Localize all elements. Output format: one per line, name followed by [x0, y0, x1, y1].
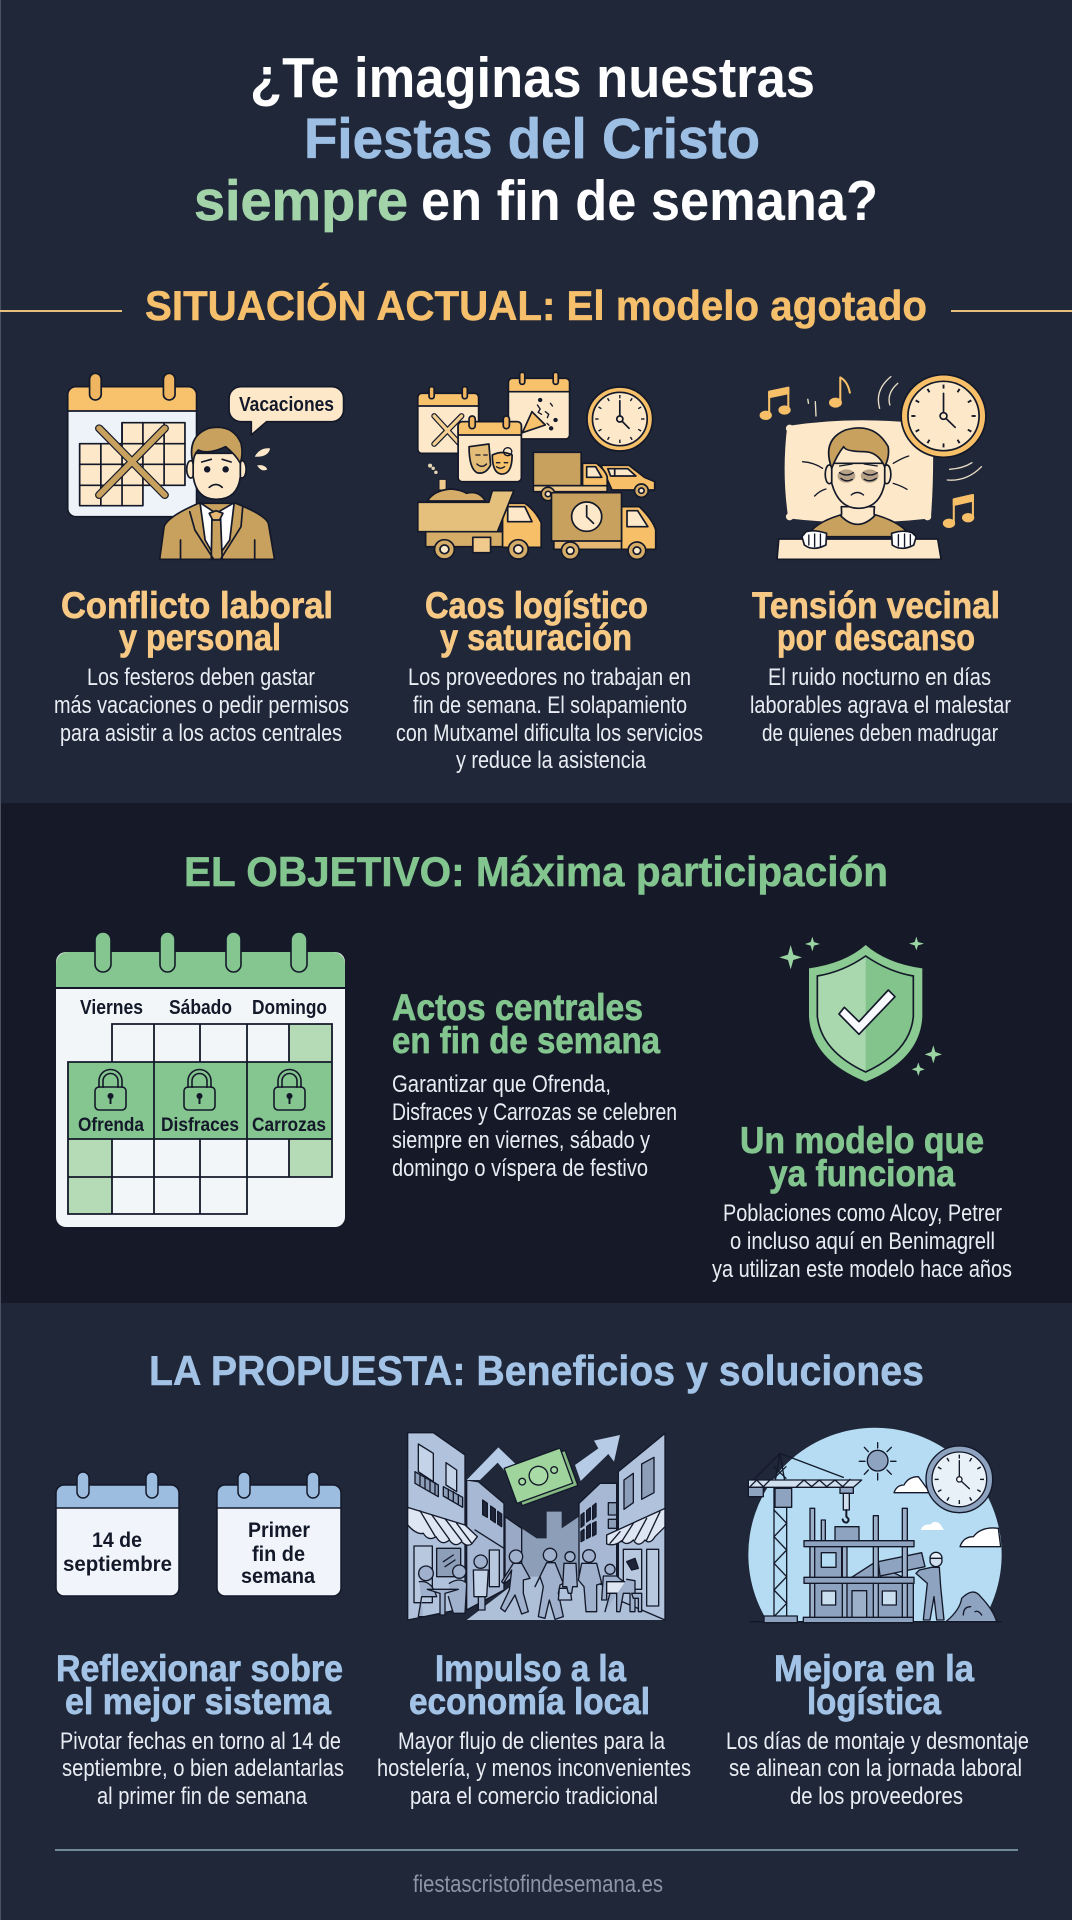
text: tensión vecinal: El ruido nocturno en días — [768, 664, 991, 691]
text: caos logístico — [396, 585, 703, 774]
text: caos logístico: Caos logístico — [425, 585, 648, 626]
text: impulso a la economía local: Mayor flujo de clientes para la — [398, 1728, 665, 1755]
text: actos centrales: Disfraces y Carrozas se celebren — [392, 1099, 677, 1126]
text: actos centrales: Garantizar que Ofrenda, — [392, 1071, 611, 1098]
title: Fiestas del Cristo — [304, 107, 760, 171]
text: caos logístico: Los proveedores no trabajan en — [408, 664, 691, 691]
text: reflexionar sobre el mejor sistema: septiembre, o bien adelantarlas — [62, 1755, 344, 1782]
icon: green calendar with locked days: Disfraces — [161, 1115, 239, 1136]
text: impulso a la economía local: para el comercio tradicional — [410, 1783, 658, 1810]
text: un modelo que ya funciona: ya funciona — [769, 1153, 955, 1194]
icon: green calendar with locked days: Ofrenda — [78, 1115, 144, 1136]
title — [194, 46, 878, 233]
icon: green calendar with locked days: Sábado — [169, 997, 232, 1019]
text: conflicto laboral — [54, 585, 349, 747]
text: mejora en la logística: Mejora en la — [774, 1648, 974, 1689]
icon: crossed calendar and worried employee — [68, 373, 344, 559]
text: tensión vecinal: laborables agrava el malestar — [750, 692, 1011, 719]
text: conflicto laboral: y personal — [119, 617, 281, 658]
icon: green calendar with locked days: Domingo — [252, 997, 327, 1019]
icon: shield with check — [779, 937, 942, 1082]
text: conflicto laboral: más vacaciones o pedir permisos — [54, 692, 349, 719]
text: reflexionar sobre el mejor sistema: al primer fin de semana — [97, 1783, 307, 1810]
arrow — [467, 1435, 620, 1481]
icon: calendar primer fin de semana: fin de — [252, 1543, 305, 1566]
text: un modelo que ya funciona: o incluso aquí en Benimagrell — [730, 1228, 995, 1255]
text: actos centrales: siempre en viernes, sábado y — [392, 1127, 651, 1154]
text: impulso a la economía local — [377, 1648, 691, 1810]
text: tensión vecinal — [750, 585, 1011, 747]
money — [504, 1447, 578, 1507]
text: reflexionar sobre el mejor sistema: Pivotar fechas en torno al 14 de — [60, 1728, 341, 1755]
terrace and pedestrians — [418, 1548, 642, 1619]
text: caos logístico: y reduce la asistencia — [456, 747, 646, 774]
text: un modelo que ya funciona: Poblaciones como Alcoy, Petrer — [723, 1200, 1002, 1227]
icon: street economy — [408, 1433, 665, 1620]
text: conflicto laboral: Conflicto laboral — [61, 585, 333, 626]
text: un modelo que ya funciona: Un modelo que — [740, 1120, 984, 1161]
icon: calendar primer fin de semana — [217, 1472, 341, 1596]
text: conflicto laboral: para asistir a los actos centrales — [60, 720, 342, 747]
text: reflexionar sobre el mejor sistema: Reflexionar sobre — [56, 1648, 343, 1689]
text: actos centrales: en fin de semana — [392, 1020, 660, 1061]
icon: green calendar with locked days — [56, 932, 345, 1227]
text: tensión vecinal: de quienes deben madrugar — [762, 720, 998, 747]
text: caos logístico: y saturación — [440, 617, 632, 658]
heading: situación actual: SITUACIÓN ACTUAL: El modelo agotado — [145, 281, 927, 329]
icon: construction and clock — [748, 1428, 1002, 1623]
text: conflicto laboral: Los festeros deben gastar — [87, 664, 315, 691]
notes — [761, 377, 973, 527]
icon: calendar 14 de septiembre: septiembre — [63, 1553, 172, 1576]
icon: calendar primer fin de semana: Primer — [248, 1519, 310, 1542]
title: siempre — [194, 169, 408, 233]
icon: calendar primer fin de semana: semana — [241, 1565, 315, 1588]
icon: calendar 14 de septiembre — [56, 1472, 179, 1596]
text: caos logístico: con Mutxamel dificulta los servicios — [396, 720, 703, 747]
text: actos centrales: Actos centrales — [392, 987, 643, 1028]
text: actos centrales: domingo o víspera de festivo — [392, 1155, 648, 1182]
text: mejora en la logística — [726, 1648, 1029, 1810]
text: actos centrales — [392, 987, 677, 1182]
heading: la propuesta: LA PROPUESTA: Beneficios y soluciones — [149, 1347, 924, 1394]
text: mejora en la logística: de los proveedores — [790, 1783, 963, 1810]
icon: calendar 14 de septiembre: 14 de — [92, 1529, 142, 1552]
text: mejora en la logística: se alinean con la jornada laboral — [729, 1755, 1022, 1782]
icon: sleepless neighbour — [761, 375, 986, 559]
bubble label: Vacaciones — [239, 394, 334, 416]
title: ¿Te imaginas nuestras — [250, 46, 815, 110]
title: en fin de semana? — [421, 169, 878, 233]
text: impulso a la economía local: hostelería, y menos inconvenientes — [377, 1755, 691, 1782]
footer url: fiestascristofindesemana.es — [413, 1871, 663, 1898]
text: tensión vecinal: Tensión vecinal — [752, 585, 1000, 626]
text: caos logístico: fin de semana. El solapamiento — [413, 692, 687, 719]
heading: el objetivo: EL OBJETIVO: Máxima participación — [184, 848, 888, 895]
text: un modelo que ya funciona: ya utilizan este modelo hace años — [712, 1256, 1012, 1283]
text: un modelo que ya funciona — [712, 1120, 1012, 1283]
text: mejora en la logística: logística — [807, 1681, 941, 1722]
text: tensión vecinal: por descanso — [777, 617, 975, 658]
icon: logistics chaos — [418, 372, 656, 559]
icon: green calendar with locked days: Viernes — [80, 997, 143, 1019]
text: impulso a la economía local: Impulso a la — [435, 1648, 626, 1689]
icon: green calendar with locked days: Carrozas — [252, 1115, 326, 1136]
text: reflexionar sobre el mejor sistema: el mejor sistema — [65, 1681, 331, 1722]
text: reflexionar sobre el mejor sistema — [56, 1648, 344, 1810]
text: impulso a la economía local: economía local — [409, 1681, 650, 1722]
